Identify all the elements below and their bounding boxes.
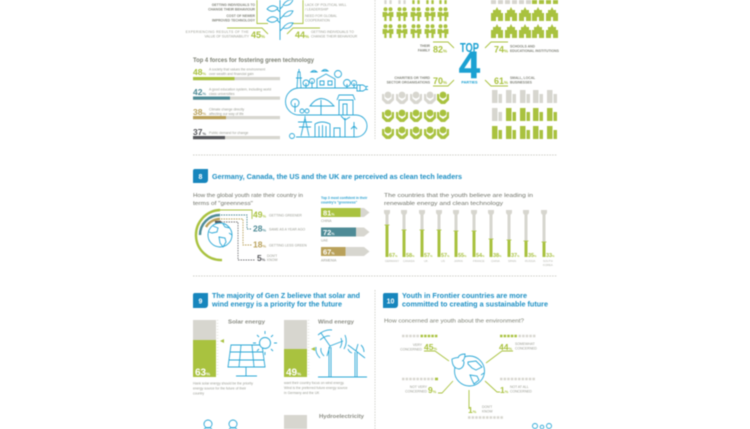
panel: wind energy: Wind energy	[318, 320, 355, 326]
bar: 38%: Climate change directly	[209, 108, 245, 112]
dots: somewhat concerned 44%: SOMEWHAT	[515, 342, 535, 346]
chart: plug bars: SPAIN	[508, 259, 516, 263]
badge 10: 10	[387, 298, 394, 306]
panel: solar energy: 63%	[195, 368, 210, 378]
stat: 44%: CHANGE THEIR BEHAVIOUR	[311, 34, 358, 38]
bar: china: 81%	[323, 208, 335, 218]
bar: 48%: 48%	[193, 67, 206, 77]
caption: want their country focus on wind energy.	[284, 381, 344, 385]
dots: somewhat concerned 44%: CONCERNED	[515, 346, 537, 350]
bar: 48%: over wealth and financial gain	[209, 72, 254, 76]
bar: 38%: 38%	[193, 107, 206, 117]
question: How concerned are youth about the environment?	[384, 318, 524, 324]
text: barriers left: GETTING INDIVIDUALS TO	[212, 3, 255, 7]
stat: 18%: 18%	[253, 240, 266, 250]
icon: plant	[267, 0, 293, 40]
dots: don't know 1%: KNOW	[482, 410, 493, 414]
stat: 44%: 44%	[295, 30, 309, 40]
chart: plug bars: UK	[424, 259, 428, 263]
icon grid: schools 74%	[491, 0, 558, 38]
chart: plug bars: US	[441, 259, 445, 263]
badge 9: 9	[199, 298, 203, 306]
divider	[374, 0, 376, 139]
stat: 44%: GETTING INDIVIDUALS TO	[311, 30, 354, 34]
stat: 5%: DON'T	[267, 254, 277, 258]
section 8 title: Germany, Canada, the US and the UK are perceived as clean tech leaders	[212, 174, 462, 181]
bar: 38%: affecting our way of life	[209, 112, 244, 116]
bar: armenia: 67%	[323, 248, 335, 256]
bar: armenia	[321, 247, 370, 262]
panel: solar energy: Solar energy	[228, 320, 266, 326]
bar: 48%: A society that values the environment	[209, 68, 265, 72]
dots: very concerned 45%: CONCERNED	[400, 348, 423, 352]
icon: globe with leaf	[452, 354, 484, 386]
stat: 49%: GETTING GREENER	[269, 214, 302, 218]
panel: wind energy: 49%	[286, 368, 301, 378]
icon: globe	[208, 223, 232, 247]
panel: solar energy	[193, 320, 277, 396]
heading: Top 4 forces for fostering green technology	[193, 58, 315, 64]
text: greenness question: How the global youth rate their country in	[193, 193, 303, 199]
panel: top 3 most confident	[321, 196, 370, 262]
dots: not very concerned 9%: 9%	[428, 385, 437, 395]
text: barriers right: NEED FOR GLOBAL	[305, 14, 337, 18]
bar: armenia: ARMENIA	[321, 258, 337, 262]
panel: top 4 forces	[193, 58, 368, 139]
stat: 44%	[287, 28, 358, 40]
chart: plug bars: 37%	[511, 253, 520, 259]
chart: plug bars: 33%	[546, 253, 555, 259]
stat: 45%: VALUE OF SUSTAINABILITY	[204, 34, 250, 38]
text: leading countries heading	[384, 193, 533, 207]
chart: plug bars: 35%	[528, 253, 537, 259]
icon grid: businesses	[492, 90, 557, 139]
text: barriers left: COST OF NEWER	[226, 14, 256, 18]
chart: plug bars: RUSSIA	[525, 259, 536, 263]
dots: not very concerned 9%	[402, 379, 438, 395]
stat: charities 70%: SECTOR ORGANISATIONS	[387, 80, 431, 84]
bar: 42%: A good education system, including world	[209, 88, 271, 92]
chart: plug bars: JAPAN	[454, 259, 463, 263]
callout: top 4: TOP	[460, 41, 479, 55]
chart: plug bars: 38%	[493, 253, 502, 259]
section 9 title: The majority of Gen Z believe that solar and	[212, 293, 360, 300]
connector lines	[424, 351, 513, 409]
bar: 37%: Public demand for change	[209, 131, 249, 135]
callout: top 4: 4	[459, 45, 480, 87]
stat: 5%: 5%	[257, 253, 266, 263]
badge 8: 8	[199, 174, 203, 181]
dots: don't know 1%: DON'T	[482, 405, 492, 409]
text: greenness question: terms of "greenness"	[193, 201, 253, 207]
text: barriers left: CHANGE THEIR BEHAVIOUR	[208, 8, 256, 12]
panel: wind energy	[284, 320, 367, 395]
chart: plug bars: CANADA	[403, 259, 415, 263]
text: barriers left	[208, 3, 256, 22]
chart: greenness arcs	[196, 210, 255, 260]
text: barriers right: / LEADERSHIP	[305, 8, 329, 12]
chart: plug bars: CHINA	[491, 259, 500, 263]
stat: schools 74%: EDUCATIONAL INSTITUTIONS	[510, 49, 560, 53]
panel: hydroelectricity	[284, 414, 365, 429]
text: leading countries heading: The countries that the youth believe are leading in	[384, 193, 533, 199]
badge 8	[193, 169, 208, 183]
stat: schools 74%	[485, 42, 560, 54]
bar: uae: UAE	[321, 238, 329, 242]
bar: uae: 72%	[323, 228, 335, 237]
icon: solar panel and sun	[228, 331, 277, 376]
text: barriers left: IMPROVED TECHNOLOGY	[212, 18, 256, 22]
caption: Hank solar energy should be the priority	[193, 382, 253, 386]
stat: small businesses 61%: 61%	[494, 76, 508, 86]
icon: people outlines	[204, 420, 237, 429]
chart: plug bars: SOUTH	[543, 259, 553, 263]
chart: plug bars: 58%	[406, 253, 415, 259]
caption: country	[193, 392, 204, 396]
panel: top 3 most confident: country's "greenness"	[321, 200, 358, 204]
dots: somewhat concerned 44%	[499, 336, 537, 352]
stat: 45%: 45%	[251, 30, 265, 40]
section 9 title	[211, 293, 360, 308]
text: barriers right: COOPERATION	[305, 18, 330, 22]
badge 9	[193, 293, 208, 308]
section 10 title: Youth in Frontier countries are more	[402, 293, 527, 300]
dots: not at all concerned 1%: CONCERNED	[510, 390, 532, 394]
panel: top 3 most confident: Top 3 most confident in their	[321, 196, 368, 200]
callout: top 4: PARTIES	[461, 80, 478, 84]
stat: family 82%: 82%	[433, 44, 447, 54]
stat: charities 70%	[387, 76, 454, 86]
dots: not at all concerned 1%	[500, 379, 536, 395]
section 10 title	[402, 293, 548, 308]
text: greenness question	[193, 193, 303, 207]
bar: 37%	[193, 127, 280, 139]
section 10 title: committed to creating a sustainable future	[402, 302, 548, 308]
stat: family 82%: THEIR	[420, 44, 431, 48]
stat: 18%: GETTING LESS GREEN	[269, 244, 307, 248]
stat: 28%: 28%	[253, 224, 266, 234]
icon grid: charities	[382, 92, 449, 139]
dots: don't know 1%	[468, 405, 504, 418]
stat: charities 70%: CHARITIES OR THIRD	[394, 76, 431, 80]
text: barriers right	[305, 3, 347, 22]
stat: 45%: EXPERIENCING RESULTS OF THE	[186, 30, 249, 34]
dots: not at all concerned 1%: 1%	[500, 385, 509, 395]
dots: not very concerned 9%: CONCERNED	[405, 390, 428, 394]
stat: small businesses 61%	[485, 76, 535, 86]
icon: people outlines right	[532, 424, 552, 429]
stat: 5%	[257, 253, 278, 263]
stat: 28%: SAME AS A YEAR AGO	[269, 228, 305, 232]
stat: schools 74%: 74%	[494, 44, 508, 54]
text: leading countries heading: renewable energy and clean technology	[384, 201, 503, 207]
bar: 42%: class universities	[209, 92, 235, 96]
dots: not very concerned 9%: NOT VERY	[410, 385, 428, 389]
dots: don't know 1%: 1%	[468, 405, 477, 415]
panel: hydroelectricity: Hydroelectricity	[319, 414, 365, 420]
text: barriers right: LACK OF POLITICAL WILL	[305, 3, 347, 7]
icon grid: family 82%	[383, 0, 448, 38]
stat: 18%	[253, 240, 307, 250]
stat: family 82%: FAMILY	[418, 48, 431, 52]
stat: 49%: 49%	[253, 210, 266, 220]
stat: schools 74%: SCHOOLS AND	[510, 44, 535, 48]
chart: plug bars: 55%	[458, 253, 467, 259]
chart: plug bars: KOREA	[543, 263, 553, 267]
icon: wind turbines	[316, 330, 367, 377]
illustration: green city	[286, 69, 368, 138]
caption	[193, 382, 253, 396]
panel: barriers plant diagram	[186, 0, 358, 40]
caption	[284, 381, 348, 395]
dots: very concerned 45%: VERY	[413, 343, 423, 347]
dots: somewhat concerned 44%: 44%	[499, 342, 512, 352]
bar: 42%	[193, 87, 280, 100]
bar: 37%: 37%	[193, 127, 206, 137]
chart: plug bars: 67%	[389, 253, 398, 259]
stat: 49%	[253, 210, 302, 220]
caption: Wind is the preferred future energy source	[284, 386, 348, 390]
badge 10	[383, 293, 398, 308]
chart: plug bars: GERMANY	[385, 259, 399, 263]
bar: china: CHINA	[321, 219, 332, 223]
bar: uae	[321, 228, 370, 242]
dots: not at all concerned 1%: NOT AT ALL	[510, 385, 529, 389]
chart: plug bars: 57%	[441, 253, 450, 259]
caption: in Germany and the UK	[284, 391, 320, 395]
stat: 45%	[186, 28, 268, 40]
bar: 48%	[193, 67, 280, 80]
chart: plug bars: 54%	[476, 253, 485, 259]
chart: plug bars	[384, 210, 555, 267]
bar: china	[321, 208, 370, 223]
stat: small businesses 61%: SMALL, LOCAL	[510, 76, 535, 80]
section 9 title: wind energy is a priority for the future	[211, 302, 342, 308]
stat: 5%: KNOW	[267, 258, 278, 262]
stat: small businesses 61%: BUSINESSES	[510, 80, 533, 84]
chart: plug bars: 57%	[424, 253, 433, 259]
dots: very concerned 45%: 45%	[424, 342, 437, 352]
stat: family 82%	[418, 42, 454, 54]
caption: energy source for the future of their	[193, 386, 247, 390]
chart: plug bars: FRANCE	[473, 259, 485, 263]
stat: 28%	[253, 224, 305, 234]
bar: 42%: 42%	[193, 87, 206, 97]
stat: charities 70%: 70%	[433, 76, 447, 86]
bar: 38%	[193, 107, 280, 119]
dots: very concerned 45%	[400, 336, 438, 352]
